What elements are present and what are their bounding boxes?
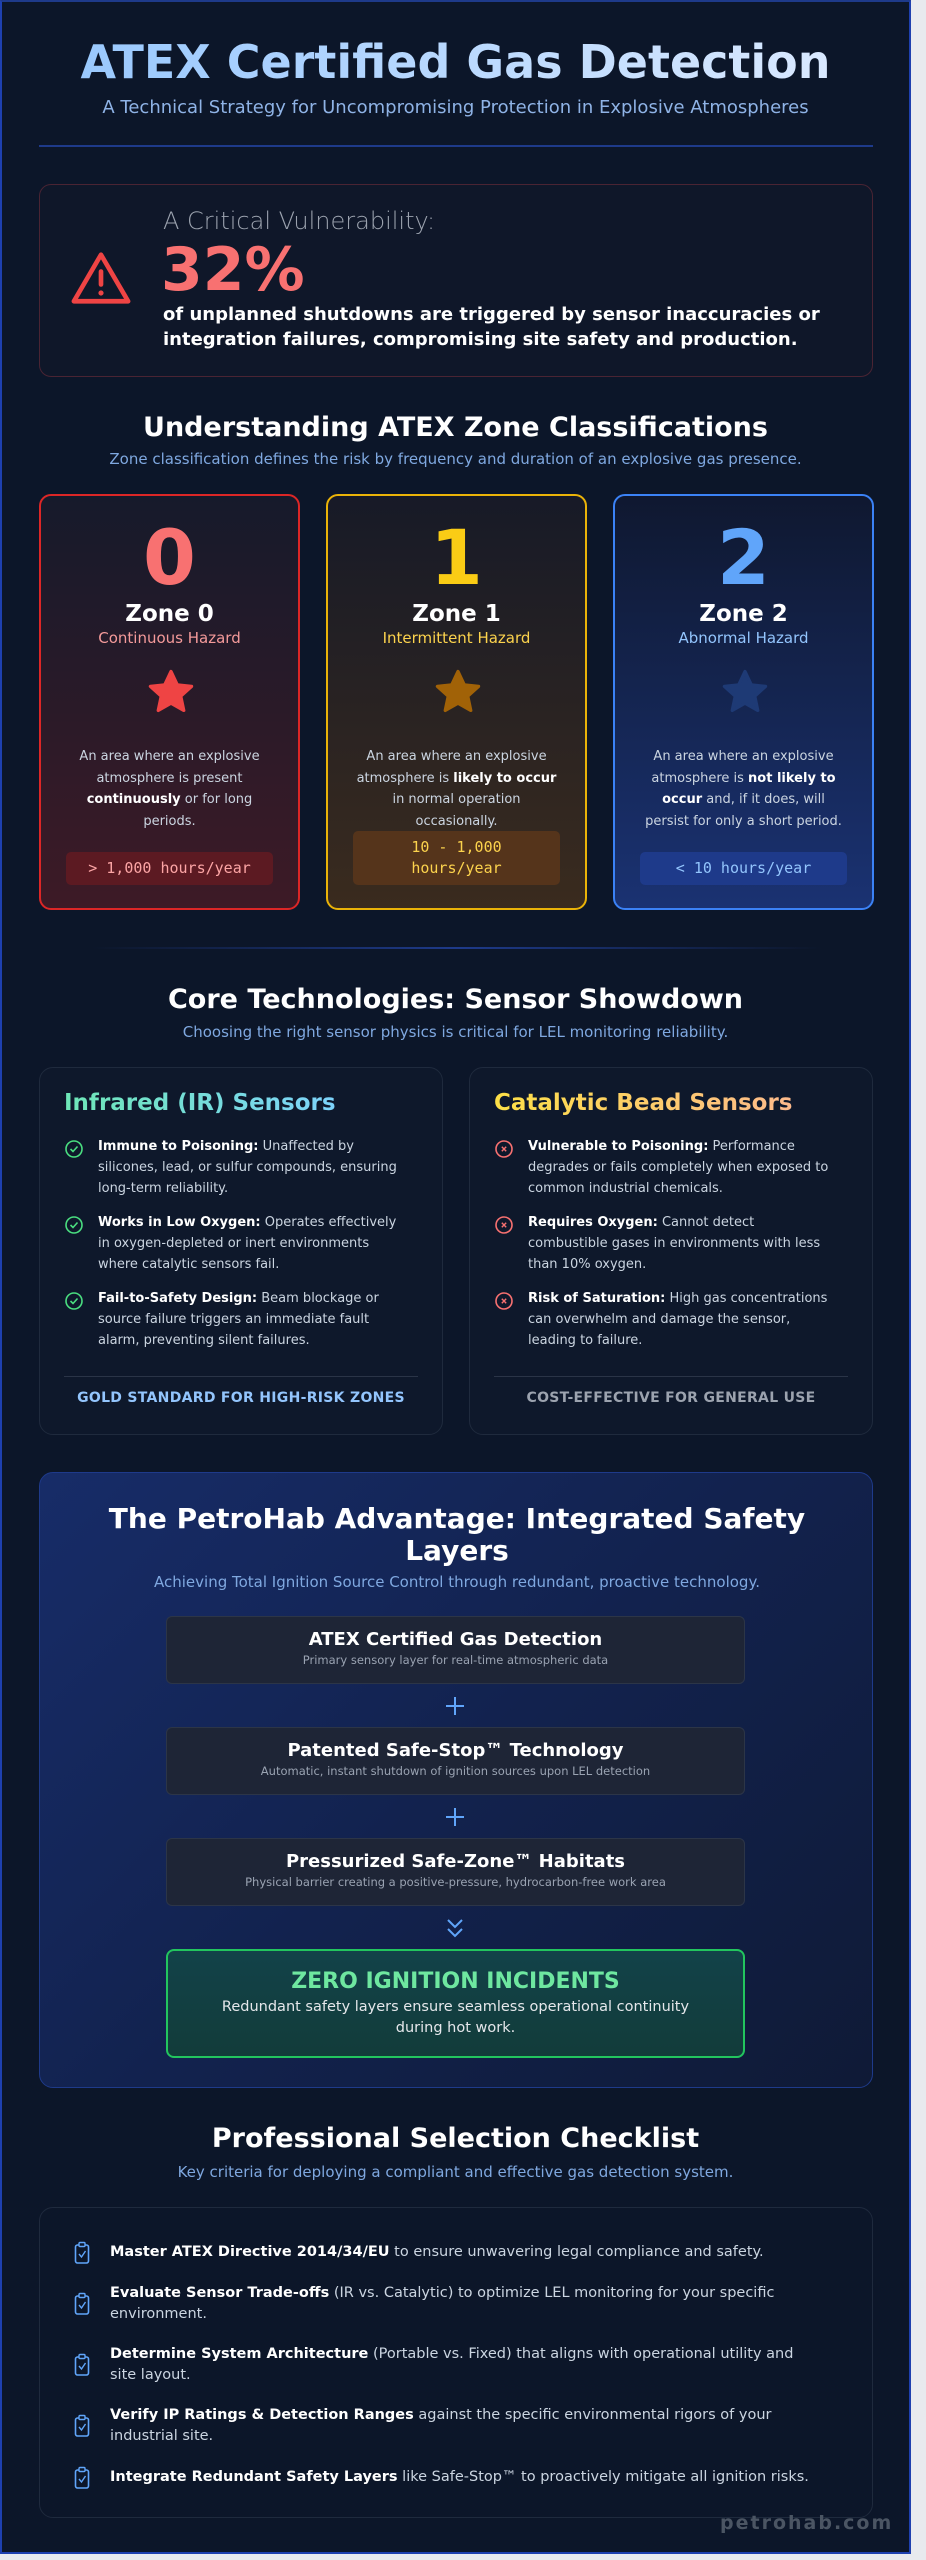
heading: The PetroHab Advantage: Integrated Safety Layers (109, 1502, 805, 1567)
panel: infrared sensors: Fail-to-Safety Design: Beam blockage or source failure triggers an immediate fault alarm, preventing silent failures. (98, 1291, 379, 1348)
panel: infrared sensors (39, 1067, 443, 1435)
panel: checklist: Determine System Architecture (Portable vs. Fixed) that aligns with operational utility and site layout. (110, 2346, 793, 2383)
panel: zone 0: Continuous Hazard (98, 629, 241, 647)
layer 1 (166, 1616, 745, 1684)
callout: critical vulnerability (39, 184, 873, 377)
subtitle: A Technical Strategy for Uncompromising Protection in Explosive Atmospheres (102, 97, 809, 118)
title: ATEX Certified Gas Detection (80, 35, 831, 89)
callout: zero ignition incidents: ZERO IGNITION INCIDENTS (291, 1969, 620, 1994)
subheading: checklist: Key criteria for deploying a compliant and effective gas detection system. (178, 2163, 733, 2181)
panel: zone 0: Zone 0 (125, 601, 214, 627)
icon: plus (446, 1808, 464, 1826)
panel: checklist: Verify IP Ratings & Detection Ranges against the specific environmental rigors of your industrial site. (110, 2407, 771, 2444)
panel: infrared sensors: Immune to Poisoning: Unaffected by silicones, lead, or sulfur compounds, ensuring long-term reliability. (98, 1139, 397, 1196)
subheading: zones: Zone classification defines the risk by frequency and duration of an explosive gas presence. (109, 450, 802, 468)
badge: > 1,000 hours/year (88, 859, 251, 877)
badge: hours/year (411, 859, 502, 877)
icon: star (436, 670, 480, 712)
panel: catalytic bead sensors: Catalytic Bead Sensors (494, 1090, 792, 1116)
panel: checklist: Integrate Redundant Safety Layers like Safe-Stop™ to proactively mitigate all ignition risks. (110, 2469, 809, 2485)
text: description: of unplanned shutdowns are triggered by sensor inaccuracies or integration failures, compromising site safety and production. (163, 304, 820, 350)
layer 3: Physical barrier creating a positive-pressure, hydrocarbon-free work area (245, 1875, 666, 1889)
icon: plus (446, 1697, 464, 1715)
panel: catalytic bead sensors: Requires Oxygen: Cannot detect combustible gases in environments with less than 10% oxygen. (528, 1215, 820, 1272)
panel: zone 1: Zone 1 (412, 601, 501, 627)
panel: checklist: Evaluate Sensor Trade-offs (IR vs. Catalytic) to optimize LEL monitoring for your specific environment. (110, 2285, 774, 2322)
text: heading: A Critical Vulnerability: (163, 207, 435, 235)
panel: catalytic bead sensors: Risk of Saturation: High gas concentrations can overwhelm and damage the sensor, leading to failure. (528, 1291, 827, 1348)
badge (353, 831, 560, 885)
panel: petrohab advantage (39, 1472, 873, 2088)
callout: zero ignition incidents: Redundant safety layers ensure seamless operational continuity during hot work. (222, 1999, 689, 2036)
panel: zone 0: An area where an explosive atmosphere is present continuously or for long periods. (79, 749, 260, 828)
panel: zone 1: 1 (430, 513, 483, 602)
panel: catalytic bead sensors (469, 1067, 873, 1435)
footer: website: petrohab.com (720, 2512, 893, 2534)
panel: zone 2 (613, 494, 874, 910)
badge: 10 - 1,000 (411, 838, 502, 856)
icon: star (722, 670, 768, 712)
panel: catalytic bead sensors: Vulnerable to Poisoning: Performance degrades or fails completely when exposed to common industrial chemicals. (528, 1139, 828, 1196)
panel: checklist: Master ATEX Directive 2014/34/EU to ensure unwavering legal compliance and safety. (110, 2244, 764, 2260)
panel: zone 0: 0 (143, 513, 196, 602)
panel: zone 2: An area where an explosive atmosphere is not likely to occur and, if it does, will persist for only a short period. (645, 749, 842, 828)
panel: zone 2: Abnormal Hazard (678, 629, 809, 647)
panel: infrared sensors: Infrared (IR) Sensors (64, 1090, 336, 1116)
panel: zone 2: Zone 2 (699, 601, 788, 627)
heading: core technologies: Core Technologies: Sensor Showdown (168, 984, 743, 1015)
callout: zero ignition incidents (166, 1949, 745, 2058)
layer 1: ATEX Certified Gas Detection (309, 1629, 602, 1650)
panel: infrared sensors: Works in Low Oxygen: Operates effectively in oxygen-depleted or inert environments where catalytic sensors fail. (98, 1215, 396, 1272)
badge (640, 852, 847, 885)
panel: checklist (39, 2207, 873, 2518)
panel: zone 2: 2 (717, 513, 770, 602)
panel: infrared sensors: GOLD STANDARD FOR HIGH-RISK ZONES (77, 1390, 405, 1406)
icon: warning triangle (72, 252, 130, 304)
layer 1: Primary sensory layer for real-time atmospheric data (303, 1653, 608, 1667)
layer 3: Pressurized Safe-Zone™ Habitats (286, 1851, 625, 1872)
layer 2: Automatic, instant shutdown of ignition sources upon LEL detection (261, 1764, 650, 1778)
heading: zones: Understanding ATEX Zone Classifications (143, 412, 768, 443)
subheading: Achieving Total Ignition Source Control through redundant, proactive technology. (154, 1573, 760, 1591)
panel: zone 1: Intermittent Hazard (383, 629, 530, 647)
icon: star (148, 670, 194, 712)
panel: zone 1 (326, 494, 587, 910)
icon: double chevron (447, 1919, 463, 1938)
subheading: core technologies: Choosing the right sensor physics is critical for LEL monitoring reliability. (183, 1023, 728, 1041)
panel: zone 1: An area where an explosive atmosphere is likely to occur in normal operation occasionally. (357, 749, 556, 828)
panel: zone 0 (39, 494, 300, 910)
layer 2: Patented Safe-Stop™ Technology (287, 1740, 624, 1761)
stat: 32%: 32% (161, 235, 305, 305)
heading: checklist: Professional Selection Checklist (212, 2123, 699, 2154)
layer 3 (166, 1838, 745, 1906)
badge: < 10 hours/year (676, 859, 811, 877)
badge (66, 852, 273, 885)
layer 2 (166, 1727, 745, 1795)
panel: catalytic bead sensors: COST-EFFECTIVE FOR GENERAL USE (526, 1390, 816, 1406)
